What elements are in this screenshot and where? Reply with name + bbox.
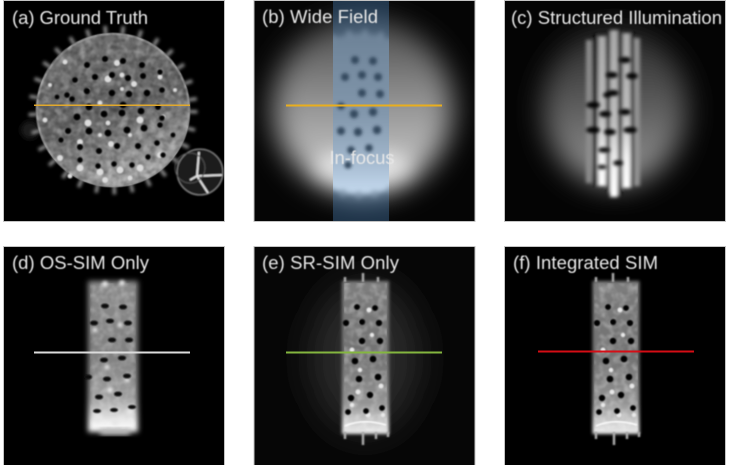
panel: (a) Ground Truth bbox=[4, 0, 224, 222]
panel: (b) Wide Field bbox=[254, 0, 475, 222]
profile line: red bbox=[538, 350, 694, 352]
heading: (f) Integrated SIM bbox=[513, 252, 658, 273]
faint halo bbox=[310, 282, 420, 434]
heading: (b) Wide Field bbox=[262, 6, 378, 27]
dim background glow bbox=[543, 26, 687, 186]
out-of-focus glow bbox=[254, 1, 475, 222]
panel: (c) Structured Illumination bbox=[504, 0, 726, 222]
dark pits on stripes bbox=[586, 57, 638, 169]
specimen: spiny pollen grain bbox=[21, 30, 223, 195]
heading: (a) Ground Truth bbox=[12, 7, 148, 28]
profile line: white bbox=[34, 352, 190, 354]
smaller three-lobed cell bbox=[175, 149, 223, 195]
profile line: amber bbox=[286, 104, 442, 106]
blue in-focus band bbox=[333, 1, 389, 221]
specimen strip bbox=[592, 281, 640, 434]
panel: (e) SR-SIM Only bbox=[254, 246, 475, 465]
illumination stripes bbox=[586, 30, 640, 197]
panel: (f) Integrated SIM bbox=[504, 246, 726, 465]
profile line: green bbox=[286, 352, 442, 354]
mottled surface texture bbox=[36, 33, 190, 187]
heading: (e) SR-SIM Only bbox=[262, 252, 400, 273]
label: In-focus: In-focus bbox=[330, 147, 394, 168]
heading: (d) OS-SIM Only bbox=[12, 252, 150, 273]
in-focus specimen band bbox=[333, 28, 389, 200]
panel: (d) OS-SIM Only bbox=[4, 246, 224, 465]
blurred specimen strip bbox=[88, 281, 138, 432]
heading: (c) Structured Illumination bbox=[511, 7, 722, 28]
profile line: amber bbox=[34, 104, 190, 106]
specimen strip bbox=[342, 281, 389, 434]
